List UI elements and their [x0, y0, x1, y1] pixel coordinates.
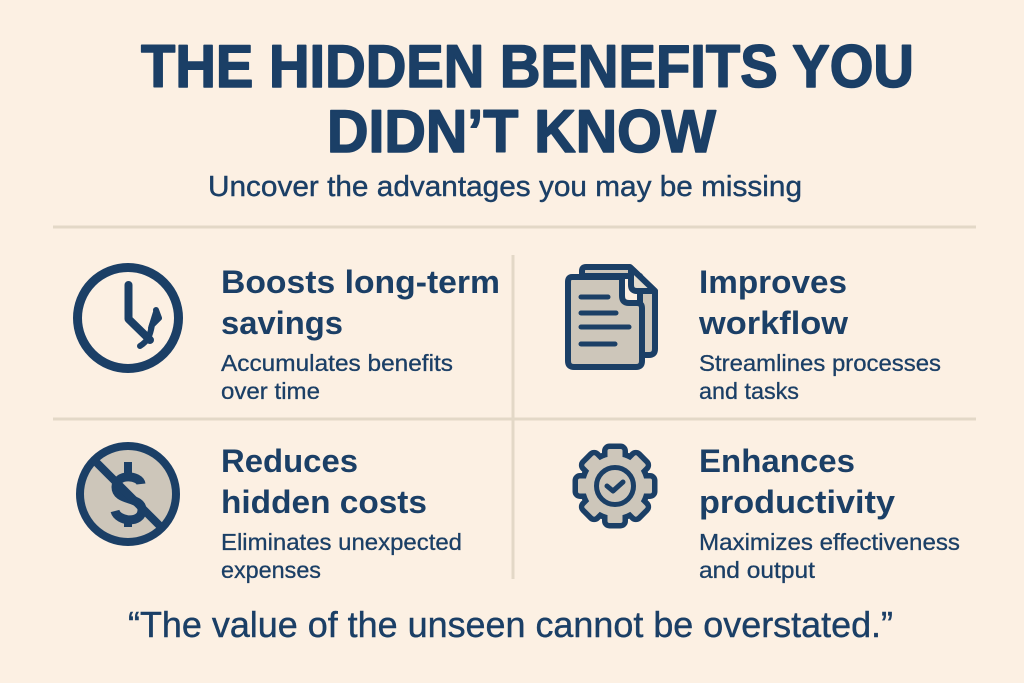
description: workflow: and tasks: [699, 378, 799, 404]
heading: long-term savings: [221, 264, 500, 341]
heading: productivity: productivity: [699, 484, 895, 520]
description: hidden costs: [221, 529, 462, 583]
description: productivity: [699, 529, 960, 583]
heading: productivity: Enhances: [699, 443, 855, 479]
heading: workflow: [698, 264, 848, 341]
icon: documents: [568, 267, 655, 367]
heading: hidden costs: Reduces: [221, 443, 358, 479]
heading: workflow: Improves: [699, 264, 847, 300]
title: THE HIDDEN BENEFITS YOU: [141, 33, 914, 100]
heading: long-term savings: savings: [221, 305, 343, 341]
heading: workflow: workflow: [698, 305, 848, 341]
icon: gear with check: [578, 449, 652, 523]
quote: “The value of the unseen cannot be overstated.”: [128, 604, 893, 645]
panel: hidden costs: [80, 443, 462, 583]
title: [141, 33, 914, 165]
icon: crossed-out dollar: [80, 446, 176, 542]
heading: productivity: [699, 443, 895, 520]
description: hidden costs: expenses: [221, 557, 321, 583]
heading: hidden costs: [221, 443, 427, 520]
title: DIDN’T KNOW: [327, 98, 716, 165]
subtitle: Uncover the advantages you may be missing: [208, 171, 802, 203]
description: workflow: Streamlines processes: [699, 350, 941, 376]
description: hidden costs: Eliminates unexpected: [221, 529, 462, 555]
heading: hidden costs: hidden costs: [221, 484, 427, 520]
icon: clock: [78, 268, 178, 368]
heading: long-term savings: Boosts long-term: [221, 264, 500, 300]
description: long-term savings: Accumulates benefits: [221, 350, 453, 376]
description: productivity: and output: [699, 557, 816, 583]
description: workflow: [699, 350, 941, 404]
description: long-term savings: [221, 350, 453, 404]
panel: long-term savings: [78, 264, 500, 404]
description: long-term savings: over time: [221, 378, 320, 404]
panel: workflow: [568, 264, 941, 404]
panel: productivity: [578, 443, 960, 583]
description: productivity: Maximizes effectiveness: [699, 529, 960, 555]
